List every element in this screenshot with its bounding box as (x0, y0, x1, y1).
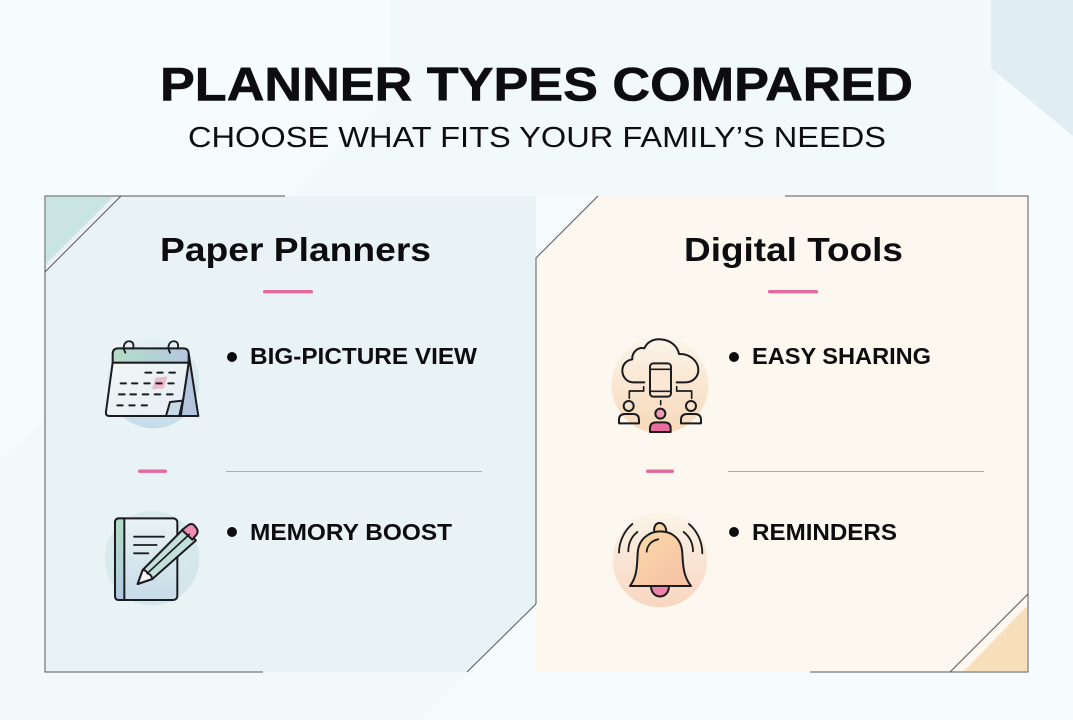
subtitle: CHOOSE WHAT FITS YOUR FAMILY’S NEEDS (188, 122, 886, 154)
corner accent: peach (964, 606, 1027, 671)
heading accent bar (768, 290, 818, 293)
icon: bell (613, 513, 707, 607)
icon: cloud sharing (612, 337, 708, 433)
panel: paper planners (45, 196, 536, 672)
row divider: digital tools (646, 470, 984, 473)
title: PLANNER TYPES COMPARED (160, 58, 913, 110)
panel outline: paper planners (45, 196, 536, 672)
heading: digital tools: Digital Tools (684, 231, 903, 268)
icon: desk calendar (106, 336, 199, 428)
bullet: big-picture view: BIG-PICTURE VIEW (250, 343, 477, 369)
bullet: memory boost: MEMORY BOOST (250, 519, 452, 545)
bullet: reminders: REMINDERS (752, 519, 897, 545)
panel background: digital tools (536, 196, 1028, 672)
bullet: easy sharing: EASY SHARING (752, 343, 931, 369)
panel: digital tools (536, 196, 1028, 672)
heading accent bar (263, 290, 313, 293)
row divider: paper planners (138, 470, 482, 473)
icon: notebook and pencil (105, 511, 199, 606)
panel outline: digital tools (536, 196, 1028, 672)
corner accent: teal (46, 197, 113, 264)
panel background: paper planners (45, 196, 536, 672)
heading: paper planners: Paper Planners (160, 231, 431, 268)
